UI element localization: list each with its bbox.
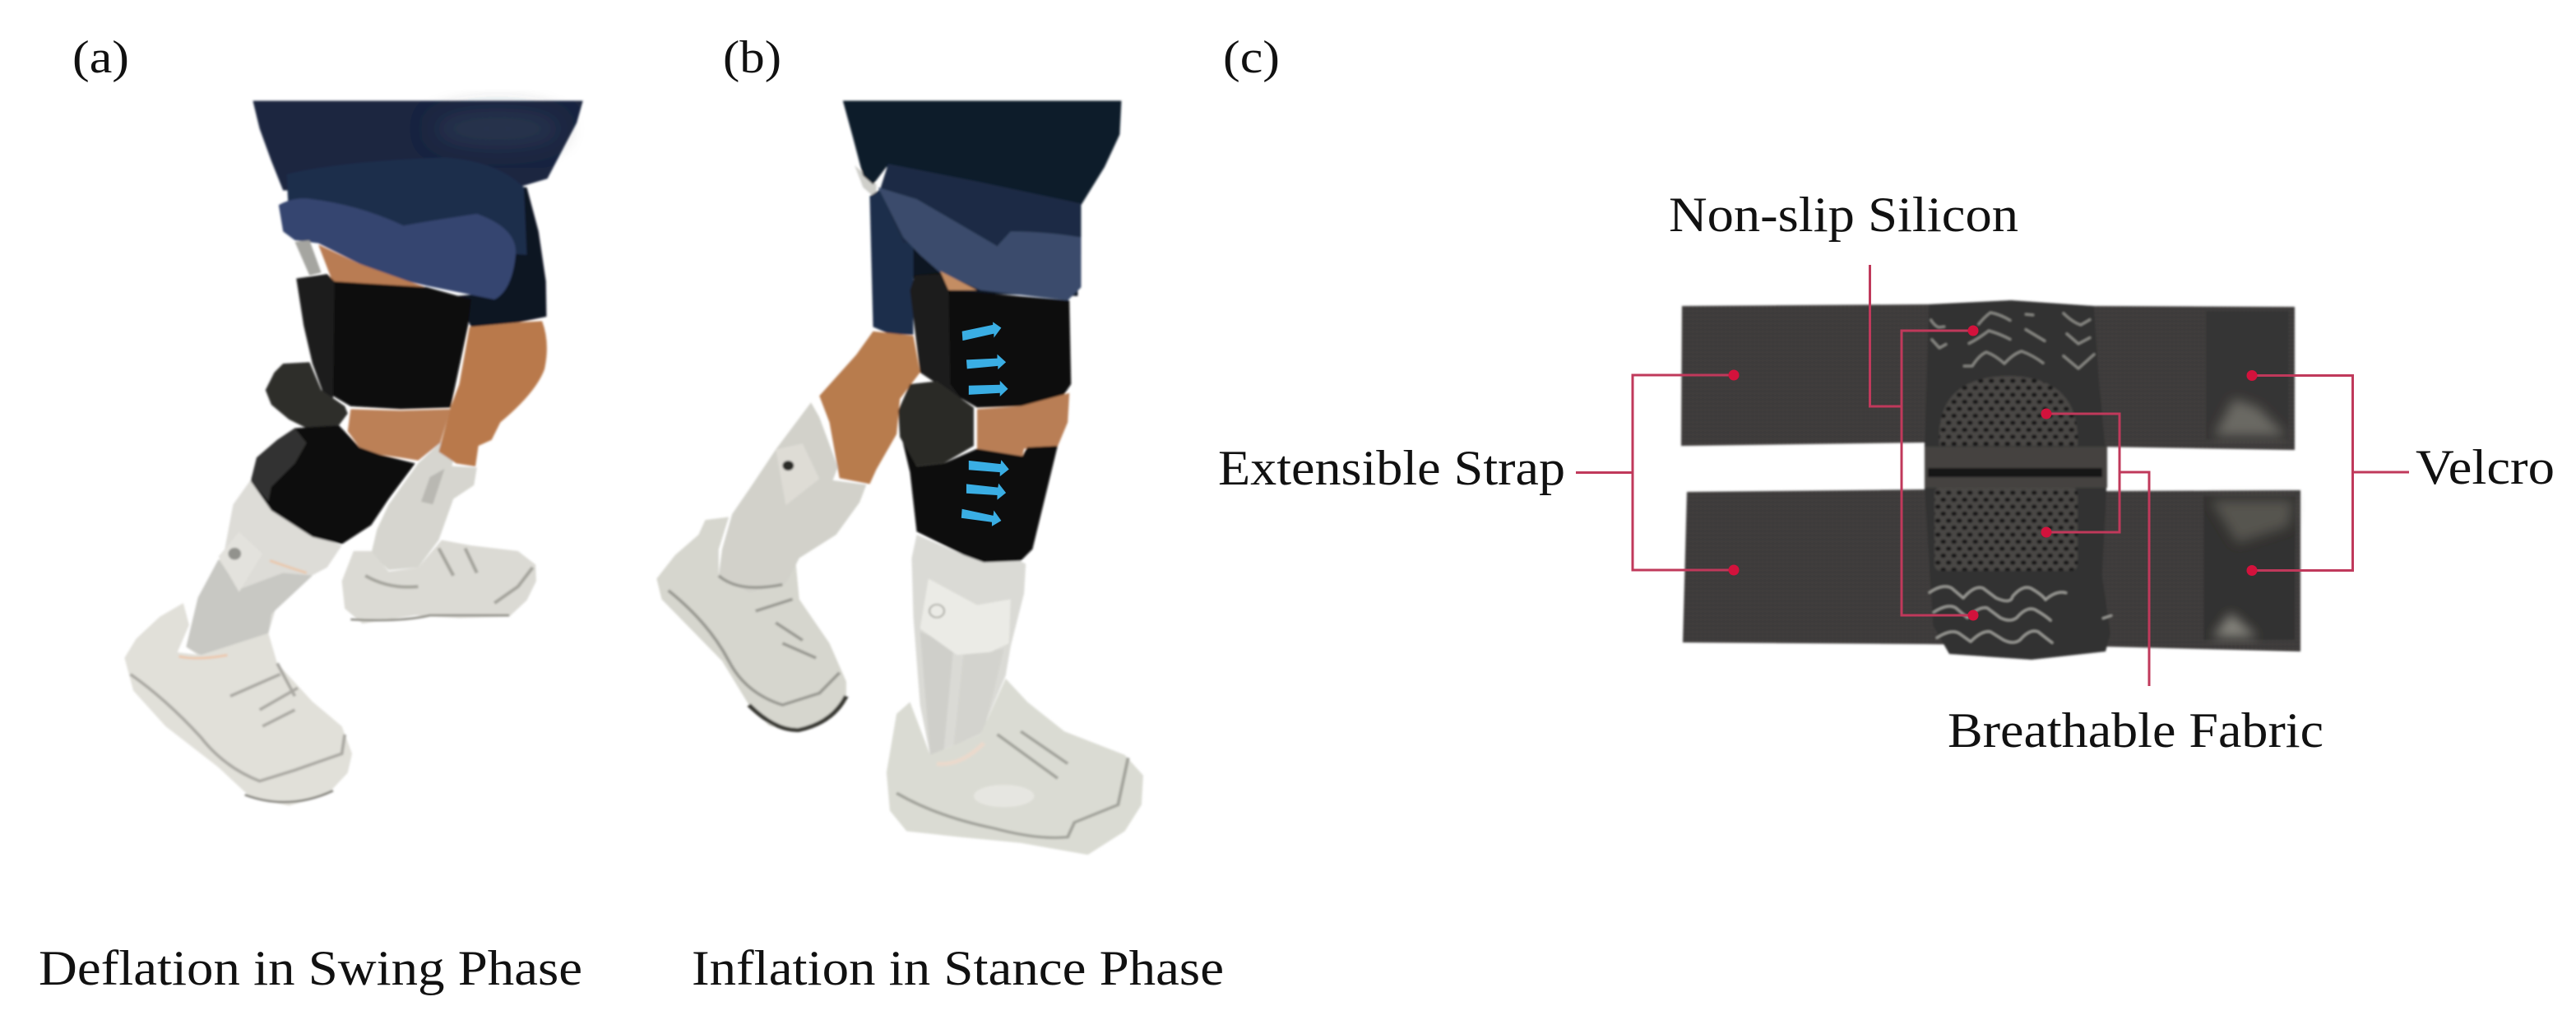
silicone waves lower [1929,586,2112,643]
lower black strap [901,437,1058,563]
front brace [186,480,342,655]
silicone waves upper [1930,313,2095,369]
lower legs and shoes of photo a [124,442,536,806]
skin above strap [940,271,977,290]
label: Extensible Strap: Extensible Strap [1218,441,1565,495]
upper velcro sheen [2214,399,2286,436]
extensible strap leader [1576,375,1734,570]
lower black strap [251,425,415,545]
cuff front [878,188,1081,300]
label: Velcro: Velcro [2416,440,2555,494]
lower mesh [1934,487,2078,571]
cuff back [286,157,527,255]
rear brace tip [855,165,877,199]
air bladder [296,274,335,399]
swing brace [719,402,866,593]
lower extensible strap [1683,489,2300,651]
panel label (b): (b) [723,32,781,83]
lower velcro sheen top [2211,500,2293,543]
upper arrows [962,322,1008,396]
upper black strap [333,281,471,409]
leader lines and dots [1576,265,2409,686]
cuff front [279,198,516,299]
panel label (c): (c) [1223,32,1280,83]
stance shoe [887,679,1143,855]
bladder knot [266,362,348,429]
stance brace [911,535,1026,755]
rear shoe [342,540,536,624]
blue arrows showing inflation [961,322,1009,526]
non-slip silicon leader [1870,265,1973,615]
upper velcro patch [2206,311,2289,439]
knee skin [348,409,451,461]
central panel [1925,300,2110,660]
velcro leader [2252,375,2409,571]
lower legs and shoes of photo b [656,402,1143,855]
photo c: knee strap device [1681,300,2300,660]
front shoe [124,603,352,806]
rear shorts [869,188,913,335]
trousers [253,100,583,190]
panel label (a): (a) [72,32,129,83]
trousers [843,100,1121,205]
swing shoe [656,517,846,731]
bladder knot [898,381,974,466]
red dots [1729,326,2257,620]
shadow behind cuff [883,184,1077,296]
fold band [1925,447,2107,488]
skin above strap [318,244,427,288]
upper leg of photo a [251,100,583,545]
caption a: Deflation in Swing Phase [39,941,582,995]
photo a: leg with deflated device in swing phase [124,100,583,806]
upper mesh [1939,376,2078,446]
rear brace [371,442,477,570]
photo b: leg with inflated device in stance phase [656,100,1143,855]
upper leg of photo b [819,100,1121,563]
rear leg skin [819,332,920,484]
knee skin [977,393,1069,456]
label: Non-slip Silicon: Non-slip Silicon [1669,188,2018,242]
metal clip [294,240,322,276]
label: Breathable Fabric: Breathable Fabric [1948,703,2323,758]
upper extensible strap [1681,304,2295,450]
lower velcro patch [2203,496,2296,640]
breathable fabric leader [2046,414,2149,686]
rear dark thigh [456,184,546,327]
caption b: Inflation in Stance Phase [692,941,1224,995]
cuff back [880,164,1081,255]
lower velcro sheen [2212,613,2258,638]
rear knee skin [438,321,547,466]
upper black strap [913,272,1071,408]
air bladder [910,274,964,401]
lower arrows [961,460,1009,526]
